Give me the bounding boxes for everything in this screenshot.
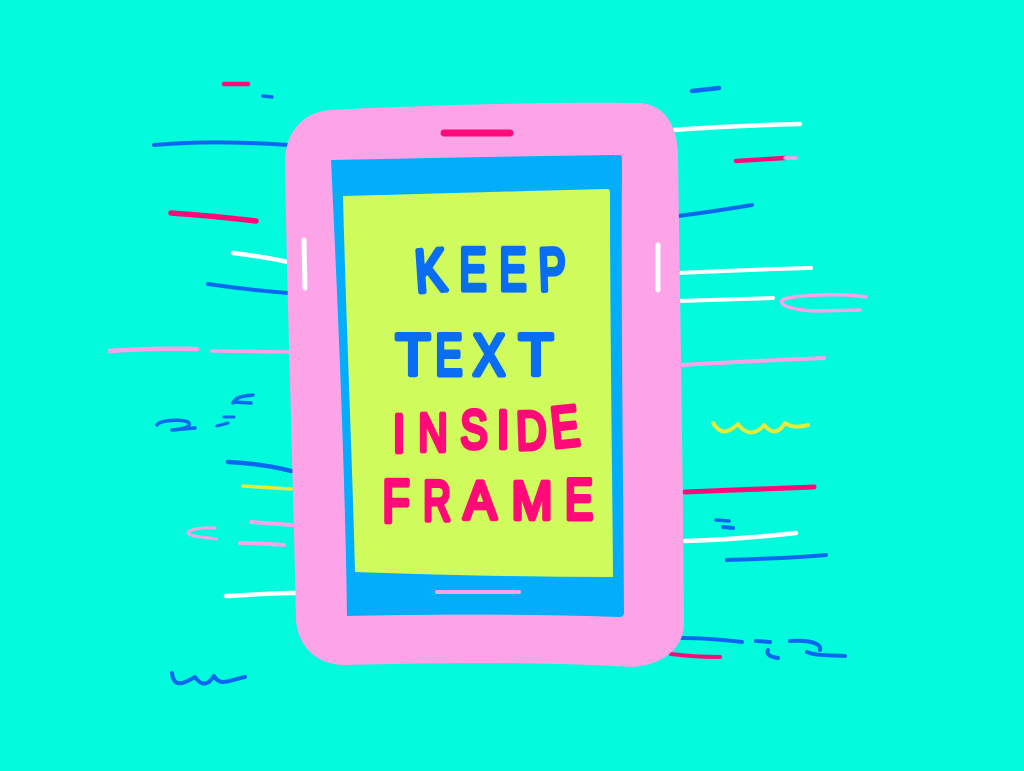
left motion lines: [110, 84, 295, 684]
screen frame: [331, 155, 624, 617]
line: FRAME: [382, 466, 593, 536]
home bar: [437, 590, 519, 594]
line: FRAME: R: [423, 470, 451, 533]
line: FRAME: F: [382, 469, 410, 536]
speaker bar: [444, 130, 510, 136]
line: KEEP: K: [413, 237, 449, 305]
line: INSIDE: E: [548, 394, 582, 460]
screen panel: [343, 189, 613, 577]
line: KEEP: [413, 236, 567, 305]
line: TEXT: X: [473, 322, 505, 388]
line: FRAME: M: [512, 470, 552, 530]
line: KEEP: E: [459, 236, 487, 303]
line: INSIDE: S: [460, 401, 488, 460]
line: TEXT: T: [519, 323, 553, 388]
line: KEEP: E: [499, 236, 527, 303]
line: INSIDE: I: [393, 403, 405, 464]
phone body: [285, 103, 684, 667]
line: KEEP: P: [538, 236, 567, 303]
line: TEXT: E: [435, 322, 463, 388]
line: TEXT: [396, 322, 553, 388]
line: FRAME: E: [565, 466, 593, 532]
line: TEXT: T: [396, 323, 430, 388]
line: FRAME: A: [464, 470, 497, 530]
headline text: [382, 236, 593, 536]
line: INSIDE: N: [418, 404, 448, 463]
line: INSIDE: [393, 394, 582, 464]
right side button: [656, 245, 660, 290]
line: INSIDE: I: [497, 399, 509, 460]
right motion lines: [671, 88, 866, 658]
left side button: [304, 240, 305, 288]
line: INSIDE: D: [515, 400, 548, 462]
